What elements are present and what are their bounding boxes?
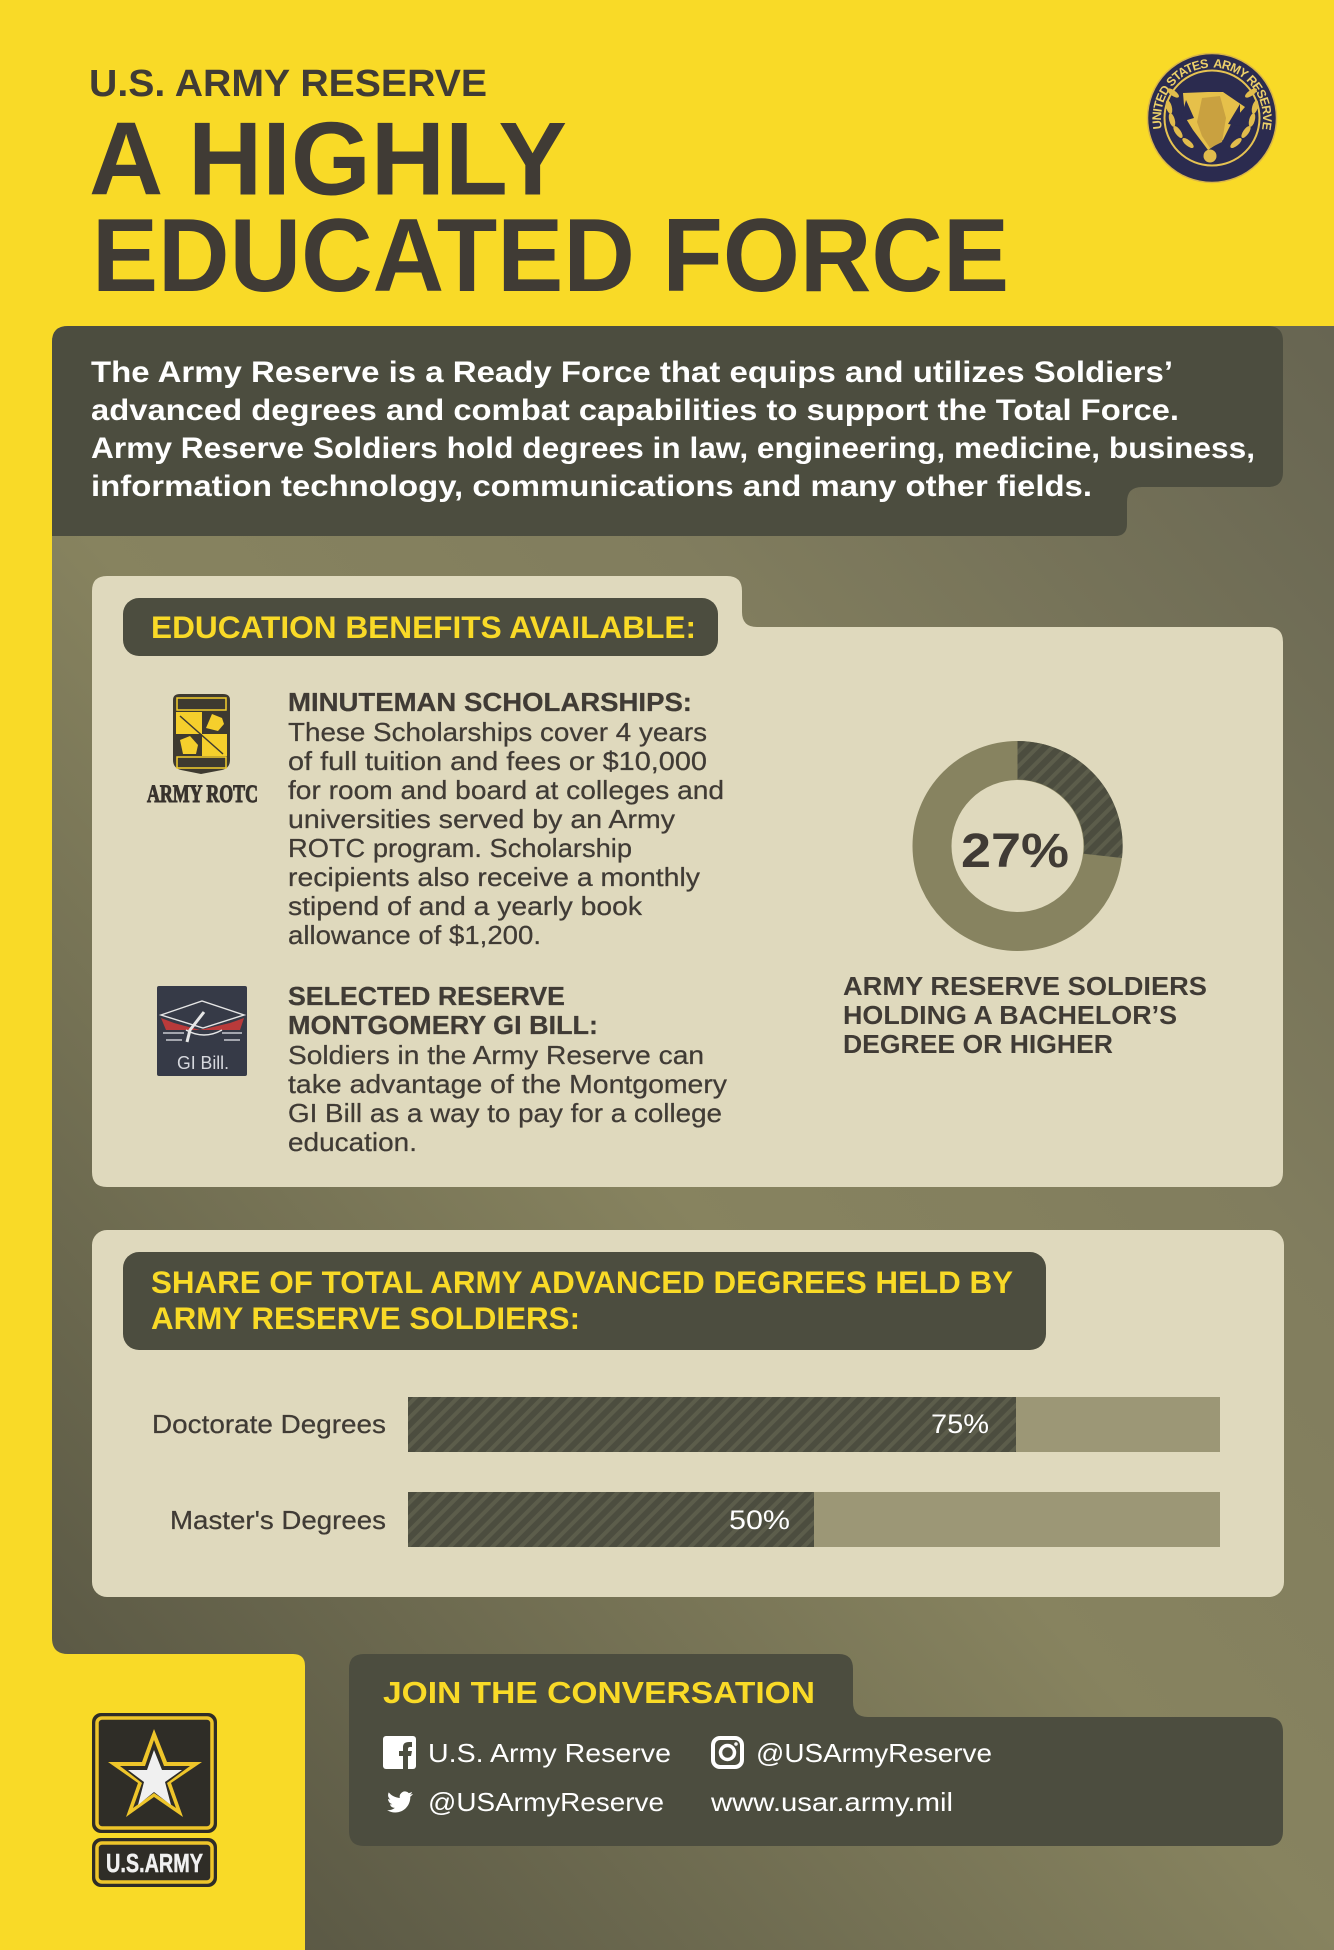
text: Montgomery GI Bill: GI Bill as a way to pay for a college	[288, 1098, 722, 1128]
heading: education benefits: EDUCATION BENEFITS AVAILABLE:	[151, 609, 696, 645]
heading: advanced degrees: SHARE OF TOTAL ARMY ADVANCED DEGREES HELD BY	[151, 1264, 1013, 1300]
heading: join the conversation: JOIN THE CONVERSATION	[383, 1675, 815, 1710]
text: donut caption: DEGREE OR HIGHER	[843, 1031, 1113, 1059]
donut chart: 27%: 27%	[961, 825, 1069, 878]
text: Twitter handle: @USArmyReserve	[428, 1787, 664, 1817]
eyebrow: U.S. Army Reserve: U.S. ARMY RESERVE	[89, 63, 487, 105]
panel: education benefits	[92, 576, 1283, 1187]
text: Minuteman scholarships: These Scholarships cover 4 years	[288, 717, 707, 747]
text: Minuteman scholarships: MINUTEMAN SCHOLARSHIPS:	[288, 687, 692, 717]
intro text: Army Reserve Soldiers hold degrees in law, engineering, medicine, business,	[91, 432, 1255, 465]
icon: Army Reserve seal	[1146, 52, 1278, 184]
intro text: advanced degrees and combat capabilities to support the Total Force.	[91, 394, 1179, 427]
bar: master's degrees 50%: Master's Degrees	[170, 1505, 386, 1535]
heading: education benefits	[123, 598, 718, 656]
text: donut caption	[843, 973, 1207, 1059]
panel: advanced degrees	[92, 1230, 1284, 1597]
icon: U.S. Army logo	[92, 1713, 217, 1887]
icon: U.S. Army logo: U.S.ARMY	[106, 1848, 203, 1878]
text: Montgomery GI Bill: education.	[288, 1127, 417, 1157]
icon: Army ROTC logo	[147, 694, 258, 808]
bar: doctorate degrees 75%	[152, 1397, 1220, 1452]
icon: GI Bill logo: GI Bill.	[177, 1053, 229, 1073]
bar: doctorate degrees 75%: 75%	[931, 1409, 989, 1439]
intro text	[91, 356, 1255, 503]
text: Facebook handle: U.S. Army Reserve	[428, 1738, 671, 1768]
text: Montgomery GI Bill: SELECTED RESERVE	[288, 981, 565, 1011]
text: Minuteman scholarships: allowance of $1,200.	[288, 920, 541, 950]
title line 1: A HIGHLY	[89, 102, 567, 218]
icon: Army ROTC logo: ARMY ROTC	[147, 781, 258, 808]
text: Minuteman scholarships	[288, 687, 724, 950]
bar: master's degrees 50%: 50%	[729, 1505, 790, 1535]
text: donut caption: HOLDING A BACHELOR’S	[843, 1002, 1177, 1030]
text: Minuteman scholarships: for room and board at colleges and	[288, 775, 724, 805]
text: Minuteman scholarships: ROTC program. Scholarship	[288, 833, 632, 863]
text: Minuteman scholarships: of full tuition and fees or $10,000	[288, 746, 707, 776]
intro text: The Army Reserve is a Ready Force that equips and utilizes Soldiers’	[91, 356, 1173, 389]
icon: GI Bill logo	[157, 986, 247, 1076]
panel: introduction	[52, 326, 1283, 536]
icon: Army Reserve seal: UNITED STATES ARMY RESERVE	[1152, 59, 1272, 130]
icon: Facebook	[383, 1736, 416, 1769]
text: Montgomery GI Bill: take advantage of the Montgomery	[288, 1069, 727, 1099]
donut chart: 27%	[932, 741, 1123, 932]
heading: advanced degrees	[123, 1252, 1046, 1350]
bar: master's degrees 50%	[170, 1492, 1220, 1547]
header	[89, 63, 1009, 314]
text: Minuteman scholarships: recipients also receive a monthly	[288, 862, 700, 892]
text: Minuteman scholarships: stipend of and a yearly book	[288, 891, 643, 921]
bar: doctorate degrees 75%: Doctorate Degrees	[152, 1409, 386, 1439]
panel: join the conversation	[349, 1654, 1283, 1846]
heading: advanced degrees: ARMY RESERVE SOLDIERS:	[151, 1300, 580, 1336]
title line 2: EDUCATED FORCE	[92, 198, 1009, 314]
text: Instagram handle: @USArmyReserve	[756, 1738, 992, 1768]
text: Montgomery GI Bill	[288, 981, 727, 1157]
text: Montgomery GI Bill: MONTGOMERY GI BILL:	[288, 1010, 598, 1040]
intro text: information technology, communications and many other fields.	[91, 470, 1092, 503]
text: website: www.usar.army.mil	[710, 1787, 953, 1817]
text: Minuteman scholarships: universities served by an Army	[288, 804, 675, 834]
text: Montgomery GI Bill: Soldiers in the Army Reserve can	[288, 1040, 704, 1070]
text: donut caption: ARMY RESERVE SOLDIERS	[843, 973, 1207, 1001]
icon: Instagram	[713, 1738, 742, 1767]
icon: Twitter	[387, 1791, 413, 1812]
